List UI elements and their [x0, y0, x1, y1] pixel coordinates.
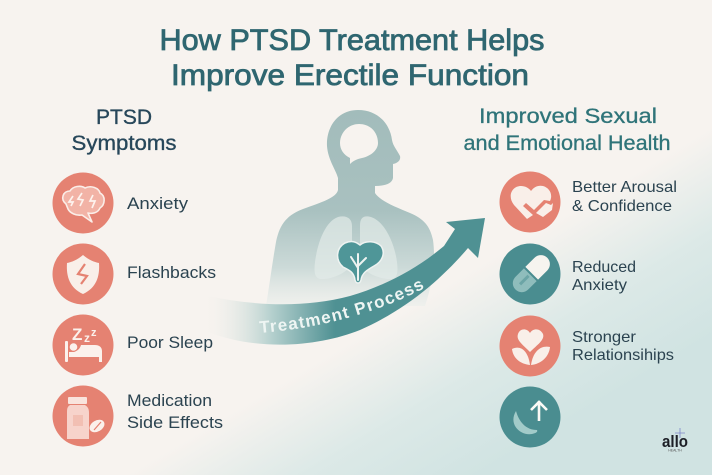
title — [160, 24, 544, 92]
logo: allo health: allo — [662, 432, 688, 451]
item: medication side effects — [52, 386, 223, 446]
icon: bed and zzz: z — [84, 331, 90, 345]
icon: shield with bolt — [67, 255, 99, 294]
lungs — [315, 216, 397, 279]
label: Better Arousal — [572, 179, 677, 196]
item: stronger relationships — [500, 316, 674, 376]
label: Reduced — [572, 259, 636, 276]
label: Anxiety — [127, 194, 189, 213]
item: better arousal and confidence: & Confidence — [572, 198, 672, 215]
heading: PTSD symptoms: Symptoms — [72, 132, 176, 155]
label: Stronger — [572, 329, 637, 346]
item: medication side effects: Side Effects — [127, 413, 223, 432]
icon: heart with leaves — [512, 329, 550, 365]
logo: allo health: HEALTH — [668, 448, 682, 452]
item: flashbacks — [52, 244, 216, 304]
icon: up arrow — [531, 401, 547, 421]
heading: improved sexual and emotional health: and Emotional Health — [464, 132, 670, 155]
icon: bed and zzz: z — [91, 327, 97, 339]
icon: speech bubble in head — [340, 124, 378, 164]
item: reduced anxiety — [500, 244, 636, 304]
heading: PTSD symptoms: PTSD — [96, 106, 152, 129]
item: stronger relationships: Relationsihips — [572, 347, 674, 364]
icon: tree in lungs — [338, 242, 383, 283]
label: Poor Sleep — [127, 333, 213, 352]
body silhouette — [266, 110, 434, 306]
label: Medication — [127, 391, 212, 410]
label: Flashbacks — [127, 263, 216, 282]
title: How PTSD Treatment Helps — [160, 24, 544, 57]
heading: improved sexual and emotional health — [464, 105, 670, 155]
icon: bed and zzz: Z — [72, 325, 82, 344]
icon: moon — [513, 411, 537, 434]
icon: pill bottle — [67, 397, 107, 439]
title: Improve Erectile Function — [171, 59, 529, 92]
item: reduced anxiety: Anxiety — [572, 277, 627, 294]
item: anxiety — [52, 172, 189, 234]
icon: capsule — [509, 251, 554, 296]
icon: heart with check — [511, 186, 553, 219]
arrow: treatment process — [227, 218, 485, 345]
item: better arousal and confidence — [500, 172, 677, 232]
item: poor sleep — [52, 314, 213, 376]
heading: PTSD symptoms — [72, 106, 176, 155]
arrow label: Treatment Process — [259, 281, 424, 333]
item: moon and arrow — [500, 386, 560, 448]
heading: improved sexual and emotional health: Improved Sexual — [479, 105, 657, 128]
icon: brain — [63, 186, 104, 222]
icon: bed and zzz — [65, 325, 102, 362]
